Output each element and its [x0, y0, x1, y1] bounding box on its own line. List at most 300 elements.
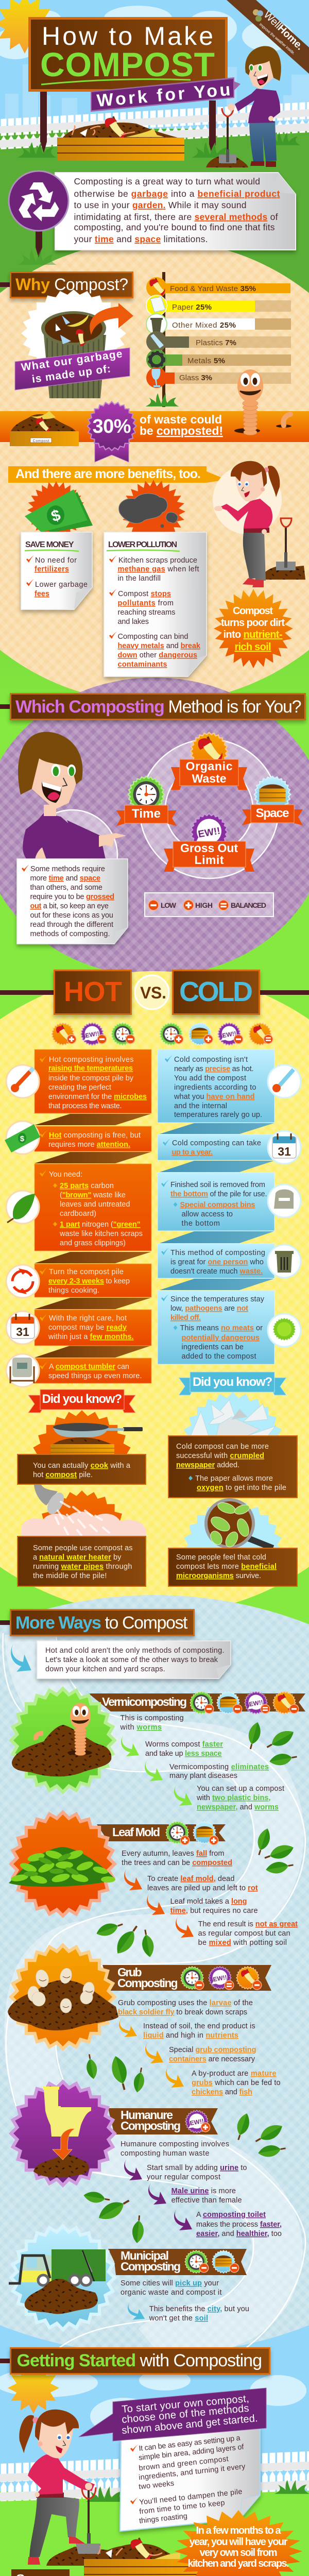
method: municipal composting	[9, 2224, 249, 2332]
badge: time: Time	[132, 807, 161, 821]
legend: low high balanced	[145, 893, 273, 917]
purple 30 percent seal: 30%	[93, 416, 131, 437]
cold box: pathogens: low, pathogens are not	[170, 1304, 248, 1313]
hot box: few months: within just a few months.	[48, 1333, 134, 1341]
paper: methods explanation: more time and space	[30, 874, 100, 883]
cold box: one person: doesn't create much waste.	[170, 1267, 263, 1276]
cold fact box: microorganisms: compost lets more beneficial	[176, 1563, 277, 1571]
title ribbon: Composting	[117, 1976, 178, 1990]
paper: methods explanation: out a bit, so keep an eye	[30, 902, 109, 910]
sign posts	[36, 92, 216, 258]
bar: other mixed	[165, 318, 255, 330]
hot fact box: cook: hot compost pile.	[33, 1471, 93, 1479]
text steps: containers are necessary	[169, 2055, 255, 2063]
intro text: composting, and you're bound to find one that fits	[74, 222, 275, 232]
text steps: composting human waste	[121, 2149, 209, 2158]
cold fact box: microorganisms	[168, 1548, 297, 1586]
hot box: you need: and grass clippings)	[60, 1239, 126, 1247]
icon: trash can	[146, 314, 167, 334]
paper: save money: fertilizers	[35, 565, 69, 573]
paper: lower pollution: LOWER POLLUTION	[108, 540, 177, 549]
bottom picket fence	[0, 2451, 309, 2503]
title ribbon	[89, 1693, 305, 1711]
legend: low high balanced: LOW	[161, 901, 177, 909]
intro text	[74, 176, 280, 244]
sign: hot: HOT	[64, 976, 122, 1007]
bar: plastics	[165, 336, 236, 348]
cold column folded connectors	[160, 1123, 274, 1290]
method: vermicomposting	[9, 1686, 305, 1811]
bottom scene clouds	[0, 2368, 306, 2435]
speech banner: to start your own compost: To start your own compost,	[122, 2393, 250, 2415]
speech banner: to start your own compost: choose one of the methods	[121, 2403, 249, 2426]
cold box: up to a year: up to a year.	[172, 1148, 213, 1157]
cold fact box: newspaper	[168, 1436, 297, 1498]
text steps: chickens and fish	[192, 2088, 252, 2096]
badge: organic waste: Organic	[185, 759, 233, 773]
section dome: pale blue	[0, 1595, 309, 2354]
paper: lower pollution: down other dangerous	[117, 651, 197, 659]
title ribbon: Leaf Mold	[112, 1825, 160, 1839]
text steps: liquid and high in nutrients	[143, 2031, 238, 2040]
grass hill	[0, 132, 309, 309]
cold fact box: newspaper: oxygen to get into the pile	[197, 1484, 286, 1492]
icon: tumbler	[6, 1354, 39, 1387]
hot fact box: water heater: the middle of the pile!	[33, 1572, 107, 1580]
text steps	[121, 2279, 249, 2323]
garbage can illustration	[21, 290, 126, 398]
brand ribbon: WellHome.	[262, 9, 305, 53]
hot fact box: water heater: Some people use compost as	[33, 1544, 133, 1552]
sign: sources	[11, 2569, 70, 2576]
hot fact box: cook: You can actually cook with a	[33, 1462, 131, 1470]
paper: getting started tips: ingredients, and turning it every	[139, 2463, 246, 2482]
compost crate with pile bottom	[84, 2538, 197, 2576]
text steps: A composting toilet	[196, 2211, 266, 2219]
title ribbon: Vermicomposting	[102, 1695, 187, 1708]
badge: gross out limit	[164, 812, 254, 872]
text steps: won't get the soil	[149, 2314, 208, 2323]
bar chart: garbage composition	[146, 272, 291, 407]
bar: food and yard waste: Food & Yard Waste 35%	[170, 284, 256, 293]
cold box: not precise: nearly as precise as hot.	[174, 1065, 253, 1073]
paper: lower pollution: Composting can bind	[117, 633, 188, 641]
bottom grass	[0, 2492, 309, 2576]
orange 30 percent band	[0, 369, 309, 462]
legend: low high balanced: BALANCED	[231, 901, 266, 909]
rating badges: EW!!	[249, 1699, 264, 1708]
cold side icons	[268, 1065, 301, 1347]
icon: leaf	[6, 1191, 39, 1224]
cold box: one person: This method of composting	[170, 1249, 265, 1257]
paper: save money: fees	[35, 590, 49, 598]
ribbon: did you know cold	[179, 1372, 286, 1395]
bar: food and yard waste	[165, 283, 290, 293]
cold fact box: newspaper: successful with crumpled	[176, 1452, 264, 1460]
paper: save money: No need for	[35, 556, 77, 565]
hot box: raising temperatures: creating the perfect	[48, 1083, 111, 1092]
badge: space	[242, 775, 303, 825]
speech banner: to start your own compost	[79, 2388, 266, 2441]
paper: more ways intro: down your kitchen and yard scraps.	[45, 1665, 165, 1673]
burst with grubs	[8, 1943, 118, 2051]
banner: what our garbage is made up of: What our garbage	[21, 348, 123, 374]
curved arrow	[90, 303, 133, 335]
paper: getting started tips: It can be as easy as setting up a	[139, 2434, 241, 2453]
section dome: yellow	[0, 971, 309, 1615]
banner: more benefits: And there are more benefits, too.	[15, 467, 201, 481]
paper: methods explanation: methods of composting.	[30, 930, 110, 938]
burst: in a few months: very own soil from	[200, 2547, 277, 2558]
paper: methods explanation: than others, and some	[30, 884, 102, 892]
paper: lower pollution: Compost stops	[118, 590, 171, 598]
text steps: This benefits the city, but you	[149, 2305, 249, 2313]
cold box: not precise: and the internal	[174, 1102, 227, 1110]
text: of waste could be composted	[140, 413, 223, 437]
small compost crate	[10, 411, 79, 446]
brand ribbon	[227, 0, 309, 74]
woman with shovel	[213, 461, 305, 587]
cold box: one person	[158, 1244, 274, 1278]
paper: methods explanation	[17, 859, 128, 944]
burst with leaf pile	[9, 1810, 117, 1918]
section dome: purple	[0, 677, 309, 976]
text steps: A by-product are mature	[192, 2070, 276, 2078]
hot box: few months: With the right care, hot	[49, 1314, 127, 1323]
bar: plastics: Plastics 7%	[196, 338, 236, 347]
burst: compost turns poor dirt: rich soil	[235, 641, 271, 653]
icon: paper	[146, 295, 167, 316]
crate	[50, 1437, 114, 1455]
worm small	[276, 414, 291, 428]
sign: vs	[135, 975, 169, 1009]
icon: calendar hot: 31	[16, 1325, 29, 1338]
sign: cold: COLD	[179, 976, 253, 1007]
sign: vs: VS.	[140, 984, 166, 1002]
icon: apple core	[146, 277, 167, 298]
paper: lower pollution: heavy metals and break	[117, 642, 201, 650]
title ribbon	[108, 2249, 247, 2275]
title ribbon: Composting	[121, 2260, 181, 2273]
bottom tufts	[86, 2480, 309, 2502]
hot box: tumbler	[35, 1358, 151, 1383]
title ribbon	[108, 2108, 218, 2134]
burst: pollution clouds	[119, 480, 185, 544]
leaves	[95, 1827, 296, 1958]
paper: methods explanation: out for these icons as you	[30, 911, 113, 920]
paper: lower pollution: reaching streams	[117, 608, 175, 617]
hot box: raising temperatures: environment for the microbes	[48, 1093, 147, 1101]
hot box: you need: 1 part nitrogen ("green"	[60, 1221, 140, 1229]
hot rating badges: EW!!	[85, 1030, 100, 1039]
paper: getting started tips: two weeks	[139, 2479, 175, 2491]
hot box: free but attention	[35, 1126, 151, 1151]
cold fact box: microorganisms: microorganisms survive.	[176, 1572, 261, 1580]
hot column folded connectors	[35, 1114, 151, 1358]
woman stepping on shovel	[19, 2410, 110, 2566]
clouds and city skyline at top	[0, 6, 309, 126]
icon: compost bin	[268, 1184, 301, 1217]
method: leaf mold	[9, 1810, 298, 1958]
hot box: turn the pile: every 2-3 weeks to keep	[48, 1277, 130, 1285]
title sign	[28, 17, 228, 92]
paper: save money: Lower garbage	[35, 581, 88, 589]
text steps: This is composting	[121, 1714, 184, 1722]
cold fact box: newspaper: Cold compost can be more	[176, 1443, 269, 1451]
text steps: be mixed with potting soil	[198, 1939, 287, 1947]
burst: in a few months: kitchen and yard scraps.	[187, 2558, 289, 2569]
text steps: To create leaf mold, dead	[147, 1875, 234, 1883]
hot box: you need: 25 parts carbon	[60, 1182, 114, 1190]
cold box: one person: is great for one person who	[170, 1258, 264, 1266]
text steps: Every autumn, leaves fall from	[122, 1850, 225, 1858]
cold box: not precise: ingredients according to	[174, 1083, 256, 1092]
icon: pathogen	[268, 1314, 301, 1347]
text steps: makes the process faster,	[196, 2221, 282, 2229]
icon: banknote: $	[20, 1134, 25, 1143]
paper: methods explanation: Some methods require	[30, 865, 105, 873]
text steps	[121, 2140, 282, 2238]
rating badges	[190, 1691, 299, 1715]
burst with worm and soil	[9, 1686, 117, 1794]
cold box: not precise: Cold composting isn't	[174, 1056, 248, 1064]
text steps: the trees and can be composted	[122, 1859, 232, 1867]
cold box: not precise: temperatures rarely go up.	[174, 1111, 262, 1119]
text steps: black soldier fly to break down scraps	[118, 2008, 247, 2016]
paper: more ways intro: Hot and cold aren't the only methods of composting.	[45, 1647, 225, 1655]
cold box: not precise	[158, 1049, 274, 1123]
heading: getting started	[0, 2347, 270, 2375]
sign: cold	[172, 970, 260, 1015]
text steps: Male urine is more	[171, 2187, 236, 2195]
paper: getting started tips: brown and green compost	[139, 2455, 229, 2472]
badge: space: Space	[255, 806, 289, 820]
diagram: composting factors ring	[116, 732, 303, 878]
bar: paper	[165, 300, 255, 312]
text: of waste could be composted: of waste could	[140, 413, 222, 426]
heading: getting started: Getting Started with Composting	[16, 2351, 262, 2370]
rating badges	[184, 2250, 239, 2274]
icon: calendar cold	[268, 1131, 301, 1164]
cold box: pathogens: Since the temperatures stay	[170, 1295, 265, 1303]
hot fact: cook with compost	[33, 1410, 143, 1454]
small compost crate: Compost	[33, 439, 49, 443]
heading: Why Compost	[0, 272, 133, 298]
compost crate with pile	[57, 116, 184, 161]
badge: gross out limit: EW!!	[197, 825, 221, 840]
burst: in a few months	[175, 2510, 302, 2576]
hot rating badges	[51, 1022, 135, 1046]
text steps: time, but requires no care	[170, 1907, 258, 1915]
text steps: effective than female	[171, 2196, 242, 2205]
bar: glass: Glass 3%	[179, 374, 212, 382]
cold fact box: newspaper: newspaper added.	[176, 1461, 239, 1469]
cold box: finished soil: allow access to	[181, 1210, 233, 1218]
bar: metals: Metals 5%	[187, 357, 225, 365]
sign: hot	[54, 970, 132, 1015]
paper: more ways intro	[37, 1641, 231, 1679]
icon: glass	[146, 367, 167, 388]
cold box: finished soil: the bottom of the pile for use.	[170, 1190, 267, 1198]
bottom sun	[8, 2362, 59, 2414]
ribbon: did you know hot: Did you know?	[42, 1392, 122, 1406]
cold box: not precise: You add the compost	[174, 1074, 246, 1082]
banner: what our garbage is made up of: is made up of:	[31, 363, 111, 385]
picket fence	[0, 101, 309, 153]
worm big	[234, 369, 263, 435]
text steps: many plant diseases	[169, 1772, 237, 1780]
paper: lower pollution	[104, 532, 207, 676]
heading: more ways to compost: More Ways to Compost	[15, 1613, 188, 1633]
paper: methods explanation: read through the different	[30, 921, 113, 929]
title ribbon	[102, 1965, 271, 1991]
text steps: Instead of soil, the end product is	[143, 2022, 255, 2030]
text steps: The end result is not as great	[198, 1920, 298, 1928]
method: humanure composting	[9, 2079, 286, 2244]
paper: lower pollution: in the landfill	[117, 574, 161, 583]
burst: compost turns poor dirt	[214, 589, 293, 668]
paper: lower pollution: pollutants from	[117, 599, 174, 607]
text steps: Leaf mold takes a long	[170, 1897, 247, 1906]
pan	[53, 1423, 143, 1437]
man pointing	[18, 732, 126, 901]
cold box: pathogens: killed off.	[170, 1314, 201, 1322]
leaves	[84, 2054, 146, 2093]
burst: compost turns poor dirt: into nutrient-	[224, 629, 282, 640]
hot box: you need: You need:	[49, 1171, 82, 1179]
serpentine white path	[3, 1633, 305, 2348]
burst: money	[25, 481, 93, 539]
method: grub composting	[8, 1943, 281, 2096]
intro paper	[55, 173, 296, 250]
cold box: finished soil: the bottom	[181, 1219, 220, 1228]
sun	[0, 0, 55, 54]
text steps: Humanure composting involves	[121, 2140, 229, 2148]
badge: organic waste	[171, 732, 247, 790]
text steps: Vermicomposting eliminates	[169, 1763, 269, 1771]
paper: lower pollution: Kitchen scraps produce	[118, 556, 197, 565]
bar: paper: Paper 25%	[172, 303, 212, 312]
paper: methods explanation: require you to be grossed	[30, 893, 114, 901]
intro text: your time and space limitations.	[74, 234, 208, 244]
legend: low high balanced: HIGH	[195, 901, 213, 909]
burst: in a few months: In a few months to a	[196, 2525, 281, 2536]
icon: recycling circle	[9, 171, 68, 231]
icon: calendar hot	[6, 1311, 39, 1344]
text steps: newspaper, and worms	[197, 1803, 279, 1811]
paper: getting started tips	[120, 2428, 260, 2531]
hot side icons	[5, 1065, 40, 1387]
ribbon: did you know cold: Did you know?	[193, 1375, 272, 1389]
cold box: not precise: what you have on hand	[174, 1093, 254, 1101]
cold fact: magnifier with microbes	[184, 1498, 282, 1548]
hot fact box: cook	[18, 1454, 146, 1484]
hot box: tumbler: speed things up even more.	[48, 1372, 142, 1380]
text steps: as regular compost but can	[198, 1929, 290, 1938]
cold box: up to a year	[158, 1134, 274, 1160]
hot box: raising temperatures: raising the temperatures	[48, 1064, 133, 1073]
hot box: few months	[35, 1310, 151, 1346]
cold fact box: newspaper: The paper allows more	[195, 1475, 273, 1483]
title ribbon: Municipal	[121, 2249, 169, 2262]
leaves	[83, 2112, 286, 2244]
text steps: with worms	[119, 1723, 162, 1732]
text steps: Some cities will pick up your	[121, 2279, 219, 2287]
hot box: turn the pile	[35, 1264, 151, 1297]
cold box: up to a year: Cold composting can take	[172, 1139, 261, 1147]
paper: lower pollution: and lakes	[117, 618, 149, 626]
text steps: and take up less space	[145, 1750, 221, 1758]
icon: thermometer cold	[268, 1065, 301, 1098]
man with shovel	[206, 46, 281, 167]
icon: calendar cold: 31	[278, 1145, 291, 1158]
paper: lower pollution: methane gas when left	[117, 565, 199, 573]
hot fact box: water heater	[18, 1536, 146, 1586]
text steps	[118, 1999, 281, 2096]
hot fact box: water heater: a natural water heater by	[33, 1553, 122, 1562]
section dome: beige	[0, 240, 309, 703]
banner: what our garbage is made up of	[15, 348, 130, 390]
icon: banknote	[5, 1121, 40, 1154]
rating badge	[185, 2110, 210, 2133]
cold box: finished soil: Special compost bins	[180, 1201, 255, 1209]
hot box: raising temperatures: that process the waste.	[48, 1102, 122, 1110]
text steps: organic waste and compost it	[121, 2289, 221, 2297]
rating badges	[165, 1821, 218, 1845]
icon: thermometer hot	[6, 1065, 39, 1098]
paper: getting started tips: things roasting	[139, 2512, 188, 2526]
hot box: free but attention: Hot composting is free, but	[49, 1131, 141, 1140]
burst: compost turns poor dirt: Compost	[233, 605, 273, 617]
rating badge: EW!!	[190, 2117, 204, 2127]
paper: save money: SAVE MONEY	[25, 540, 74, 549]
heading: more ways to compost	[0, 1609, 195, 1636]
title ribbon	[97, 1824, 226, 1841]
hot fact box: water heater: running water pipes through	[33, 1563, 132, 1571]
paper: getting started tips: simple bin area, adding layers of	[139, 2443, 245, 2462]
cold box: finished soil: Finished soil is removed from	[170, 1181, 265, 1189]
ribbon: did you know hot	[28, 1389, 135, 1413]
text steps: Grub composting uses the larvae of the	[118, 1999, 253, 2007]
cold box: finished soil	[158, 1173, 274, 1231]
intro text: Composting is a great way to turn what would	[74, 176, 260, 187]
purple 30 percent seal	[87, 401, 137, 462]
text steps: Special grub composting	[169, 2046, 256, 2054]
hot box: tumbler: A compost tumbler can	[49, 1363, 129, 1371]
hot box: raising temperatures: inside the compost pile by	[48, 1074, 134, 1082]
burst with toilet	[9, 2079, 117, 2188]
badge: organic waste: Waste	[192, 772, 227, 785]
grass tufts	[18, 132, 300, 265]
title ribbon: Composting	[121, 2119, 181, 2132]
subtitle ribbon: Work for You	[96, 80, 231, 111]
paper: getting started tips: You'll need to dampen the pile	[139, 2488, 243, 2506]
text steps: Worms compost faster	[145, 1740, 223, 1749]
icon: trash can	[268, 1245, 301, 1278]
paper: getting started tips: from time to time to keep	[139, 2499, 225, 2516]
cold box: pathogens: This means no meats or	[180, 1324, 263, 1332]
hot box: raising temperatures: Hot composting involves	[49, 1056, 134, 1064]
hot box: you need: ("brown" waste like	[60, 1191, 126, 1199]
title line 1: How to Make	[42, 22, 213, 50]
badge: gross out limit: Limit	[195, 853, 224, 867]
hot box: you need: waste like kitchen scraps	[59, 1230, 143, 1238]
heading: hot vs cold	[0, 970, 309, 1015]
paper: more ways intro: Let's take a look at some of the other ways to break	[45, 1656, 218, 1664]
intro text: to use in your garden. While it may sound	[74, 200, 246, 210]
text steps: Start small by adding urine to	[147, 2164, 247, 2172]
rating badges: EW!!	[213, 1974, 228, 1983]
